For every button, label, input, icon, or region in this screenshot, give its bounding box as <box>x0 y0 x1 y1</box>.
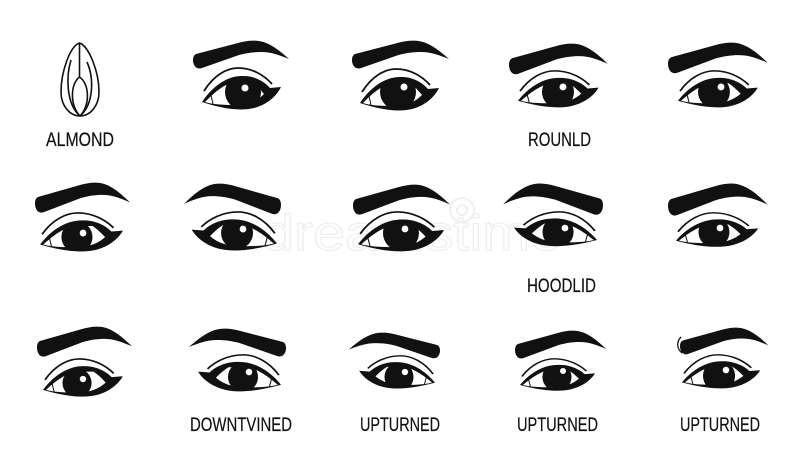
eye: row 1 column 2 <box>193 41 289 110</box>
label: hooded: HOODLID <box>527 276 596 297</box>
eye: row 3 column 1 <box>37 327 132 397</box>
eye: row 2 column 1 <box>35 183 130 253</box>
eye: row 1 column 4 <box>509 44 608 108</box>
eye: row 2 column 2 <box>184 184 281 250</box>
eye: row 3 column 5 <box>678 328 768 392</box>
label: upturned 2: UPTURNED <box>517 415 598 436</box>
eye: row 2 column 3 <box>353 185 450 251</box>
eye: row 1 column 3 <box>352 41 449 110</box>
icon: almond <box>61 43 99 116</box>
label: round: ROUNLD <box>528 130 591 151</box>
label: upturned 3: UPTURNED <box>680 415 760 436</box>
label: upturned 1: UPTURNED <box>360 415 440 436</box>
eye: row 3 column 4 <box>515 331 606 391</box>
watermark: dreamstime <box>262 205 562 261</box>
label: almond: ALMOND <box>46 130 114 151</box>
label: downturned: DOWNTVINED <box>190 415 292 436</box>
eye: row 1 column 5 <box>668 43 768 108</box>
eye: row 3 column 3 <box>349 333 440 391</box>
eye: row 3 column 2 <box>189 329 286 392</box>
eye: row 2 column 5 <box>668 184 768 248</box>
eye: row 2 column 4 <box>503 184 603 248</box>
